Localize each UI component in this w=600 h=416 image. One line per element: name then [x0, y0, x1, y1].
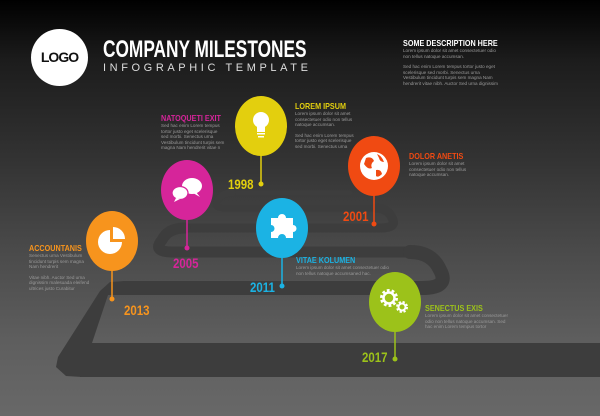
pin 2017	[369, 272, 421, 362]
text: lorem ipsum: LOREM IPSUM	[295, 101, 346, 111]
text: natoqueti: magna Nam hendrerit vitae n	[161, 145, 220, 150]
text: accountanis: tincidunt turpis sem magna	[29, 259, 84, 264]
text: accountanis: ultrices justo Curabitur	[29, 286, 75, 291]
pin 2001	[348, 136, 400, 226]
text: lorem ipsum: consectetuer odio non tellus	[295, 117, 352, 122]
text: lorem ipsum: tortor justo eget scelerisque	[295, 138, 351, 143]
text: lorem ipsum: sed morbi. Senectus urna	[295, 144, 347, 149]
text: lorem ipsum: Lorem ipsum dolor sit amet	[295, 111, 350, 116]
logo	[31, 29, 88, 86]
text: accountanis: Nam hendrerit	[29, 264, 58, 269]
description: SOME DESCRIPTION HERE	[403, 38, 498, 48]
text: senectus exis	[425, 303, 508, 329]
pin 2011	[256, 198, 308, 288]
text: vitae kolumen: VITAE KOLUMEN	[296, 255, 355, 265]
title	[103, 36, 312, 74]
description: hendrerit vitae nibh. Auctor Sed urna dignissim	[403, 81, 498, 86]
description: non tellus natoque accumsan.	[403, 54, 464, 59]
title: COMPANY MILESTONES	[103, 36, 307, 63]
text: dolor anetis: consectetuer odio non tellus	[409, 167, 466, 172]
text: accountanis: dignissim malesuada eleifend	[29, 280, 89, 285]
text: natoqueti: tortor justo eget scelerisque	[161, 129, 217, 134]
text: lorem ipsum: Sed hac enim Lorem tempus	[295, 133, 354, 138]
text: natoqueti: Sed hac enim Lorem tempus	[161, 123, 220, 128]
pin 2013	[86, 211, 138, 302]
text: natoqueti: Vestibulum tincidunt turpis sem	[161, 140, 224, 145]
pin 1998	[235, 96, 287, 186]
logo: LOGO	[41, 49, 78, 65]
text: lorem ipsum	[295, 101, 354, 149]
text: senectus exis: odio non tellus natoque accumsan. Sed	[425, 319, 505, 324]
description: Lorem ipsum dolor sit amet consectetuer odio	[403, 48, 496, 53]
text: vitae kolumen: non tellus natoque accumsaned hac.	[296, 271, 371, 276]
text: dolor anetis	[409, 151, 466, 177]
text: natoqueti: NATOQUETI EXIT	[161, 113, 221, 123]
milestone 2001: 2001	[343, 208, 369, 224]
text: senectus exis: Lorem ipsum dolor sit amet consectetuer	[425, 313, 508, 318]
description: Sed hac enim Lorem tempus tortor justo eget	[403, 64, 495, 69]
title: INFOGRAPHIC TEMPLATE	[103, 62, 312, 74]
description: Vestibulum tincidunt turpis sem magna Nam	[403, 75, 493, 80]
description: scelerisque sed morbi. Senectus urna	[403, 70, 480, 75]
text: senectus exis: SENECTUS EXIS	[425, 303, 483, 313]
text: vitae kolumen	[296, 255, 389, 276]
text: accountanis: ACCOUNTANIS	[29, 243, 82, 253]
milestone 2017: 2017	[362, 349, 388, 365]
text: natoqueti	[161, 113, 224, 150]
text: senectus exis: hac enim Lorem tempus tortor	[425, 324, 486, 329]
description	[403, 38, 498, 86]
milestone 2005: 2005	[173, 255, 199, 271]
text: natoqueti: sed morbi. Senectus urna	[161, 134, 213, 139]
pin 2005	[161, 160, 213, 250]
text: dolor anetis: natoque accumsan.	[409, 172, 449, 177]
text: accountanis: Senectus urna Vestibulum	[29, 253, 82, 258]
milestone 2011: 2011	[250, 279, 275, 295]
text: accountanis	[29, 243, 89, 291]
text: dolor anetis: DOLOR ANETIS	[409, 151, 463, 161]
milestone 1998: 1998	[228, 176, 254, 192]
milestone 2013: 2013	[124, 302, 150, 318]
text: vitae kolumen: Lorem ipsum dolor sit amet consectetuer odio	[296, 265, 389, 270]
text: dolor anetis: Lorem ipsum dolor sit amet	[409, 161, 464, 166]
text: accountanis: Vitae nibh. Auctor Sed urna	[29, 275, 85, 280]
text: lorem ipsum: natoque accumsan.	[295, 122, 335, 127]
